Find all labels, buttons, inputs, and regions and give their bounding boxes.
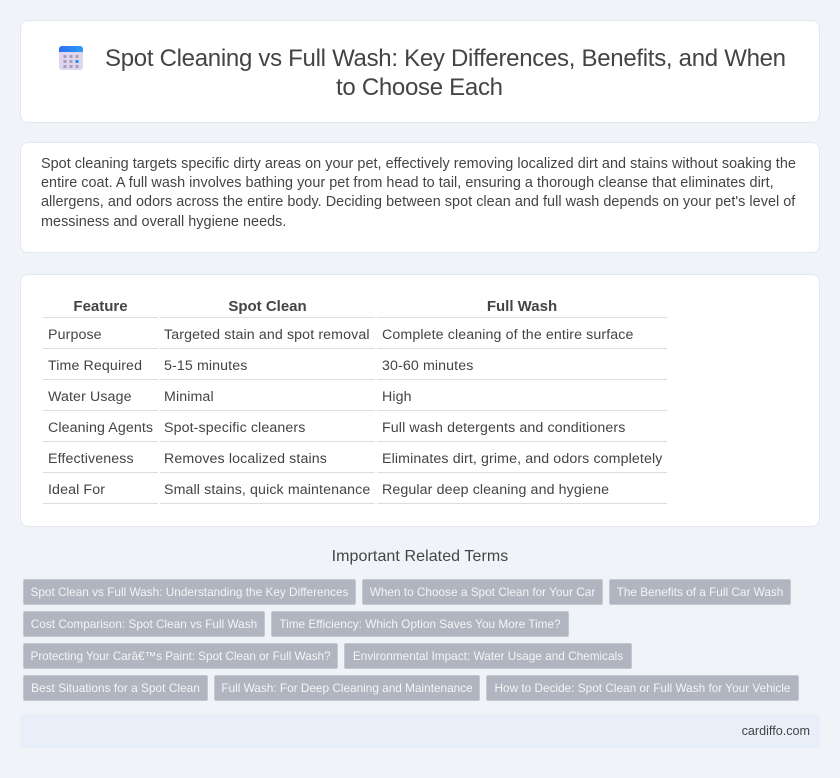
summary text	[41, 156, 796, 230]
tag: When to Choose a Spot Clean for Your Car	[370, 585, 595, 599]
row: Water Usage	[48, 389, 412, 405]
title	[105, 45, 786, 101]
row: Ideal For	[48, 482, 609, 498]
row: Cleaning Agents: Full wash detergents and conditioners	[382, 420, 625, 436]
heading: related terms: Important Related Terms	[332, 548, 508, 565]
summary text: allergens, and odors across the entire body. Deciding between spot clean and full wash depends on your pet's level of	[41, 194, 795, 210]
tag	[344, 643, 632, 669]
panel: title card	[20, 20, 820, 123]
row: Cleaning Agents: Cleaning Agents	[48, 420, 153, 436]
tag: Spot Clean vs Full Wash: Understanding the Key Differences	[30, 585, 349, 599]
row: Purpose	[48, 327, 634, 343]
row: Purpose: Targeted stain and spot removal	[164, 327, 370, 343]
tag	[214, 675, 480, 701]
row: Cleaning Agents: Spot-specific cleaners	[164, 420, 305, 436]
tag: Best Situations for a Spot Clean	[31, 681, 200, 695]
footer source: cardiffo.com	[742, 724, 810, 738]
row: Time Required: 30-60 minutes	[382, 358, 473, 374]
panel: comparison table card	[20, 274, 820, 527]
tag	[23, 643, 338, 669]
tag: Cost Comparison: Spot Clean vs Full Wash	[31, 617, 257, 631]
header: Full Wash: Full Wash	[487, 298, 557, 315]
panel: summary card	[20, 142, 820, 253]
title: to Choose Each	[336, 74, 503, 101]
header: Feature: Feature	[73, 298, 128, 315]
summary text: messiness and overall hygiene needs.	[41, 214, 286, 230]
footer bar	[20, 714, 820, 748]
row: Effectiveness: Effectiveness	[48, 451, 134, 467]
row: Ideal For: Small stains, quick maintenance	[164, 482, 370, 498]
row: Time Required	[48, 358, 473, 374]
tag	[23, 579, 356, 605]
tag	[609, 579, 791, 605]
header: Spot Clean: Spot Clean	[228, 298, 307, 315]
tag: How to Decide: Spot Clean or Full Wash for Your Vehicle	[495, 681, 790, 695]
tag: Protecting Your Carâ€™s Paint: Spot Clean or Full Wash?	[31, 649, 330, 663]
tag: Time Efficiency: Which Option Saves You More Time?	[279, 617, 561, 631]
row: Time Required: Time Required	[48, 358, 142, 374]
tag list	[23, 579, 799, 701]
row: Cleaning Agents	[48, 420, 625, 436]
row: Ideal For: Regular deep cleaning and hygiene	[382, 482, 609, 498]
tag: Full Wash: For Deep Cleaning and Maintenance	[221, 681, 473, 695]
row: Effectiveness: Removes localized stains	[164, 451, 327, 467]
row: Ideal For: Ideal For	[48, 482, 105, 498]
summary text: Spot cleaning targets specific dirty areas on your pet, effectively removing localized dirt and stains without soaking the	[41, 156, 796, 172]
row: Purpose: Complete cleaning of the entire surface	[382, 327, 634, 343]
row: Purpose: Purpose	[48, 327, 102, 343]
row: Water Usage: Water Usage	[48, 389, 132, 405]
tag	[271, 611, 569, 637]
tag: Environmental Impact: Water Usage and Chemicals	[353, 649, 623, 663]
row: Water Usage: High	[382, 389, 412, 405]
tag	[23, 675, 208, 701]
row: Water Usage: Minimal	[164, 389, 214, 405]
title: Spot Cleaning vs Full Wash: Key Differences, Benefits, and When	[105, 45, 786, 72]
summary text: entire coat. A full wash involves bathing your pet from head to tail, ensuring a thorough cleanse that eliminates dirt,	[41, 175, 774, 191]
icon: calendar	[59, 46, 83, 70]
tag	[362, 579, 603, 605]
tag	[23, 611, 265, 637]
tag	[486, 675, 799, 701]
tag: The Benefits of a Full Car Wash	[617, 585, 783, 599]
row: Effectiveness: Eliminates dirt, grime, and odors completely	[382, 451, 662, 467]
row: Effectiveness	[48, 451, 662, 467]
row: Time Required: 5-15 minutes	[164, 358, 247, 374]
